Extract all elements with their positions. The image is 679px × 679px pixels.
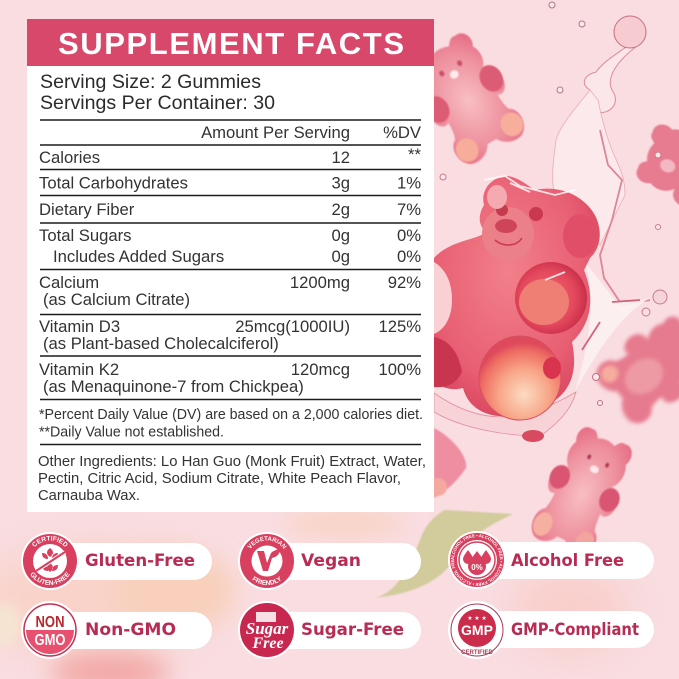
nutrition table: Amount Per Serving (201, 123, 350, 142)
nutrition table: Vitamin D3 (39, 317, 120, 336)
nutrition table: 92% (388, 273, 421, 292)
nutrition table: 125% (378, 317, 421, 336)
leaf (373, 510, 513, 598)
badge: non-gmo (21, 601, 212, 659)
icon: vegetarian friendly seal: VEGETARIAN (247, 536, 287, 549)
other ingredients: Carnauba Wax. (38, 488, 140, 504)
icon: certified gluten-free seal: CERTIFIED (32, 536, 68, 546)
nutrition table: 0% (397, 247, 421, 266)
nutrition table: (as Menaquinone-7 from Chickpea) (43, 377, 304, 396)
serving info: Serving Size: 2 Gummies (40, 71, 261, 93)
nutrition table: ** (408, 145, 422, 164)
background: blurred peaches (0, 510, 630, 679)
badge: alcohol free: Alcohol Free (511, 551, 624, 570)
nutrition table: %DV (383, 123, 422, 142)
nutrition table: 12 (331, 148, 350, 167)
gummy bear: top right (631, 114, 679, 228)
icon: alcohol free seal: ALCOHOL FREE • ALCOHOL FREE • ALCOHOL FREE • ALCOHOL FREE • (451, 534, 503, 586)
gummy bear: mid right (589, 306, 679, 432)
icon: sugar free seal (238, 601, 296, 659)
nutrition table: Includes Added Sugars (53, 247, 224, 266)
gummy bear: large centre (434, 176, 600, 420)
nutrition table: Dietary Fiber (39, 200, 135, 219)
badge: gmp-compliant (448, 601, 654, 659)
badge: vegan: Vegan (301, 551, 361, 570)
nutrition table: 100% (378, 360, 421, 379)
nutrition table: Vitamin K2 (39, 360, 119, 379)
icon: non gmo seal: NON (36, 614, 64, 631)
serving info (40, 71, 275, 114)
nutrition table: Calories (39, 148, 100, 167)
nutrition table: 1% (397, 174, 421, 192)
badge: vegan (238, 532, 421, 590)
nutrition table: 25mcg(1000IU) (235, 317, 350, 336)
footnotes: **Daily Value not established. (39, 424, 224, 440)
nutrition table: Total Sugars (39, 226, 132, 245)
icon: gmp certified seal: GMP (461, 622, 493, 638)
other ingredients: Pectin, Citric Acid, Sodium Citrate, White Peach Flavor, (38, 471, 401, 487)
nutrition table: 0g (331, 226, 350, 245)
nutrition table: 3g (331, 174, 350, 192)
icon: non gmo seal (21, 601, 79, 659)
badge: sugar-free: Sugar-Free (301, 620, 404, 639)
other ingredients: Other Ingredients: Lo Han Guo (Monk Fruit) Extract, Water, (38, 454, 426, 470)
footnotes: *Percent Daily Value (DV) are based on a 2,000 calories diet. (39, 407, 423, 423)
badge: gmp-compliant: GMP-Compliant (511, 620, 639, 639)
gummy bear: top left (400, 25, 534, 172)
icon: vegetarian friendly seal (238, 532, 294, 590)
icon: certified gluten-free seal: GLUTEN-FREE (30, 572, 70, 586)
other ingredients (38, 454, 426, 504)
footnotes (39, 407, 423, 440)
icon: non gmo seal: GMO (34, 632, 66, 649)
icon: gmp certified seal: CERTIFIED (461, 650, 493, 656)
serving info: Servings Per Container: 30 (40, 92, 275, 114)
nutrition table: (as Calcium Citrate) (43, 290, 190, 309)
nutrition table: 0% (397, 226, 421, 245)
nutrition table: (as Plant-based Cholecalciferol) (43, 334, 279, 353)
nutrition table (39, 123, 422, 396)
supplement facts panel (27, 19, 434, 512)
icon: alcohol free seal: 0% (471, 563, 483, 572)
nutrition table: 1200mg (290, 273, 350, 292)
gummy bear: lower left partial (429, 428, 466, 498)
badge: non-gmo: Non-GMO (85, 620, 176, 639)
nutrition table: 0g (331, 247, 350, 266)
icon: vegetarian friendly seal: FRIENDLY (252, 576, 281, 586)
water splash (434, 2, 667, 442)
nutrition table: Calcium (39, 273, 99, 292)
table dividers (40, 120, 421, 444)
gummy bear: bottom (523, 421, 643, 564)
panel header (27, 19, 434, 66)
badge: gluten-free (21, 532, 212, 590)
badge: gluten-free: Gluten-Free (85, 551, 195, 570)
panel header: SUPPLEMENT FACTS (58, 26, 404, 61)
badge: sugar-free (238, 601, 421, 659)
nutrition table: 120mcg (291, 360, 350, 379)
icon: sugar free seal: Free (251, 635, 284, 652)
icon: gmp certified seal: ★ ★ ★ (467, 615, 487, 622)
icon: alcohol free seal (448, 531, 504, 589)
nutrition table: 7% (397, 200, 421, 219)
icon: sugar free seal: Sugar (246, 619, 289, 638)
nutrition table: 2g (331, 200, 350, 219)
nutrition table: Total Carbohydrates (39, 174, 188, 192)
icon: gmp certified seal (448, 601, 506, 659)
icon: certified gluten-free seal (21, 532, 77, 590)
